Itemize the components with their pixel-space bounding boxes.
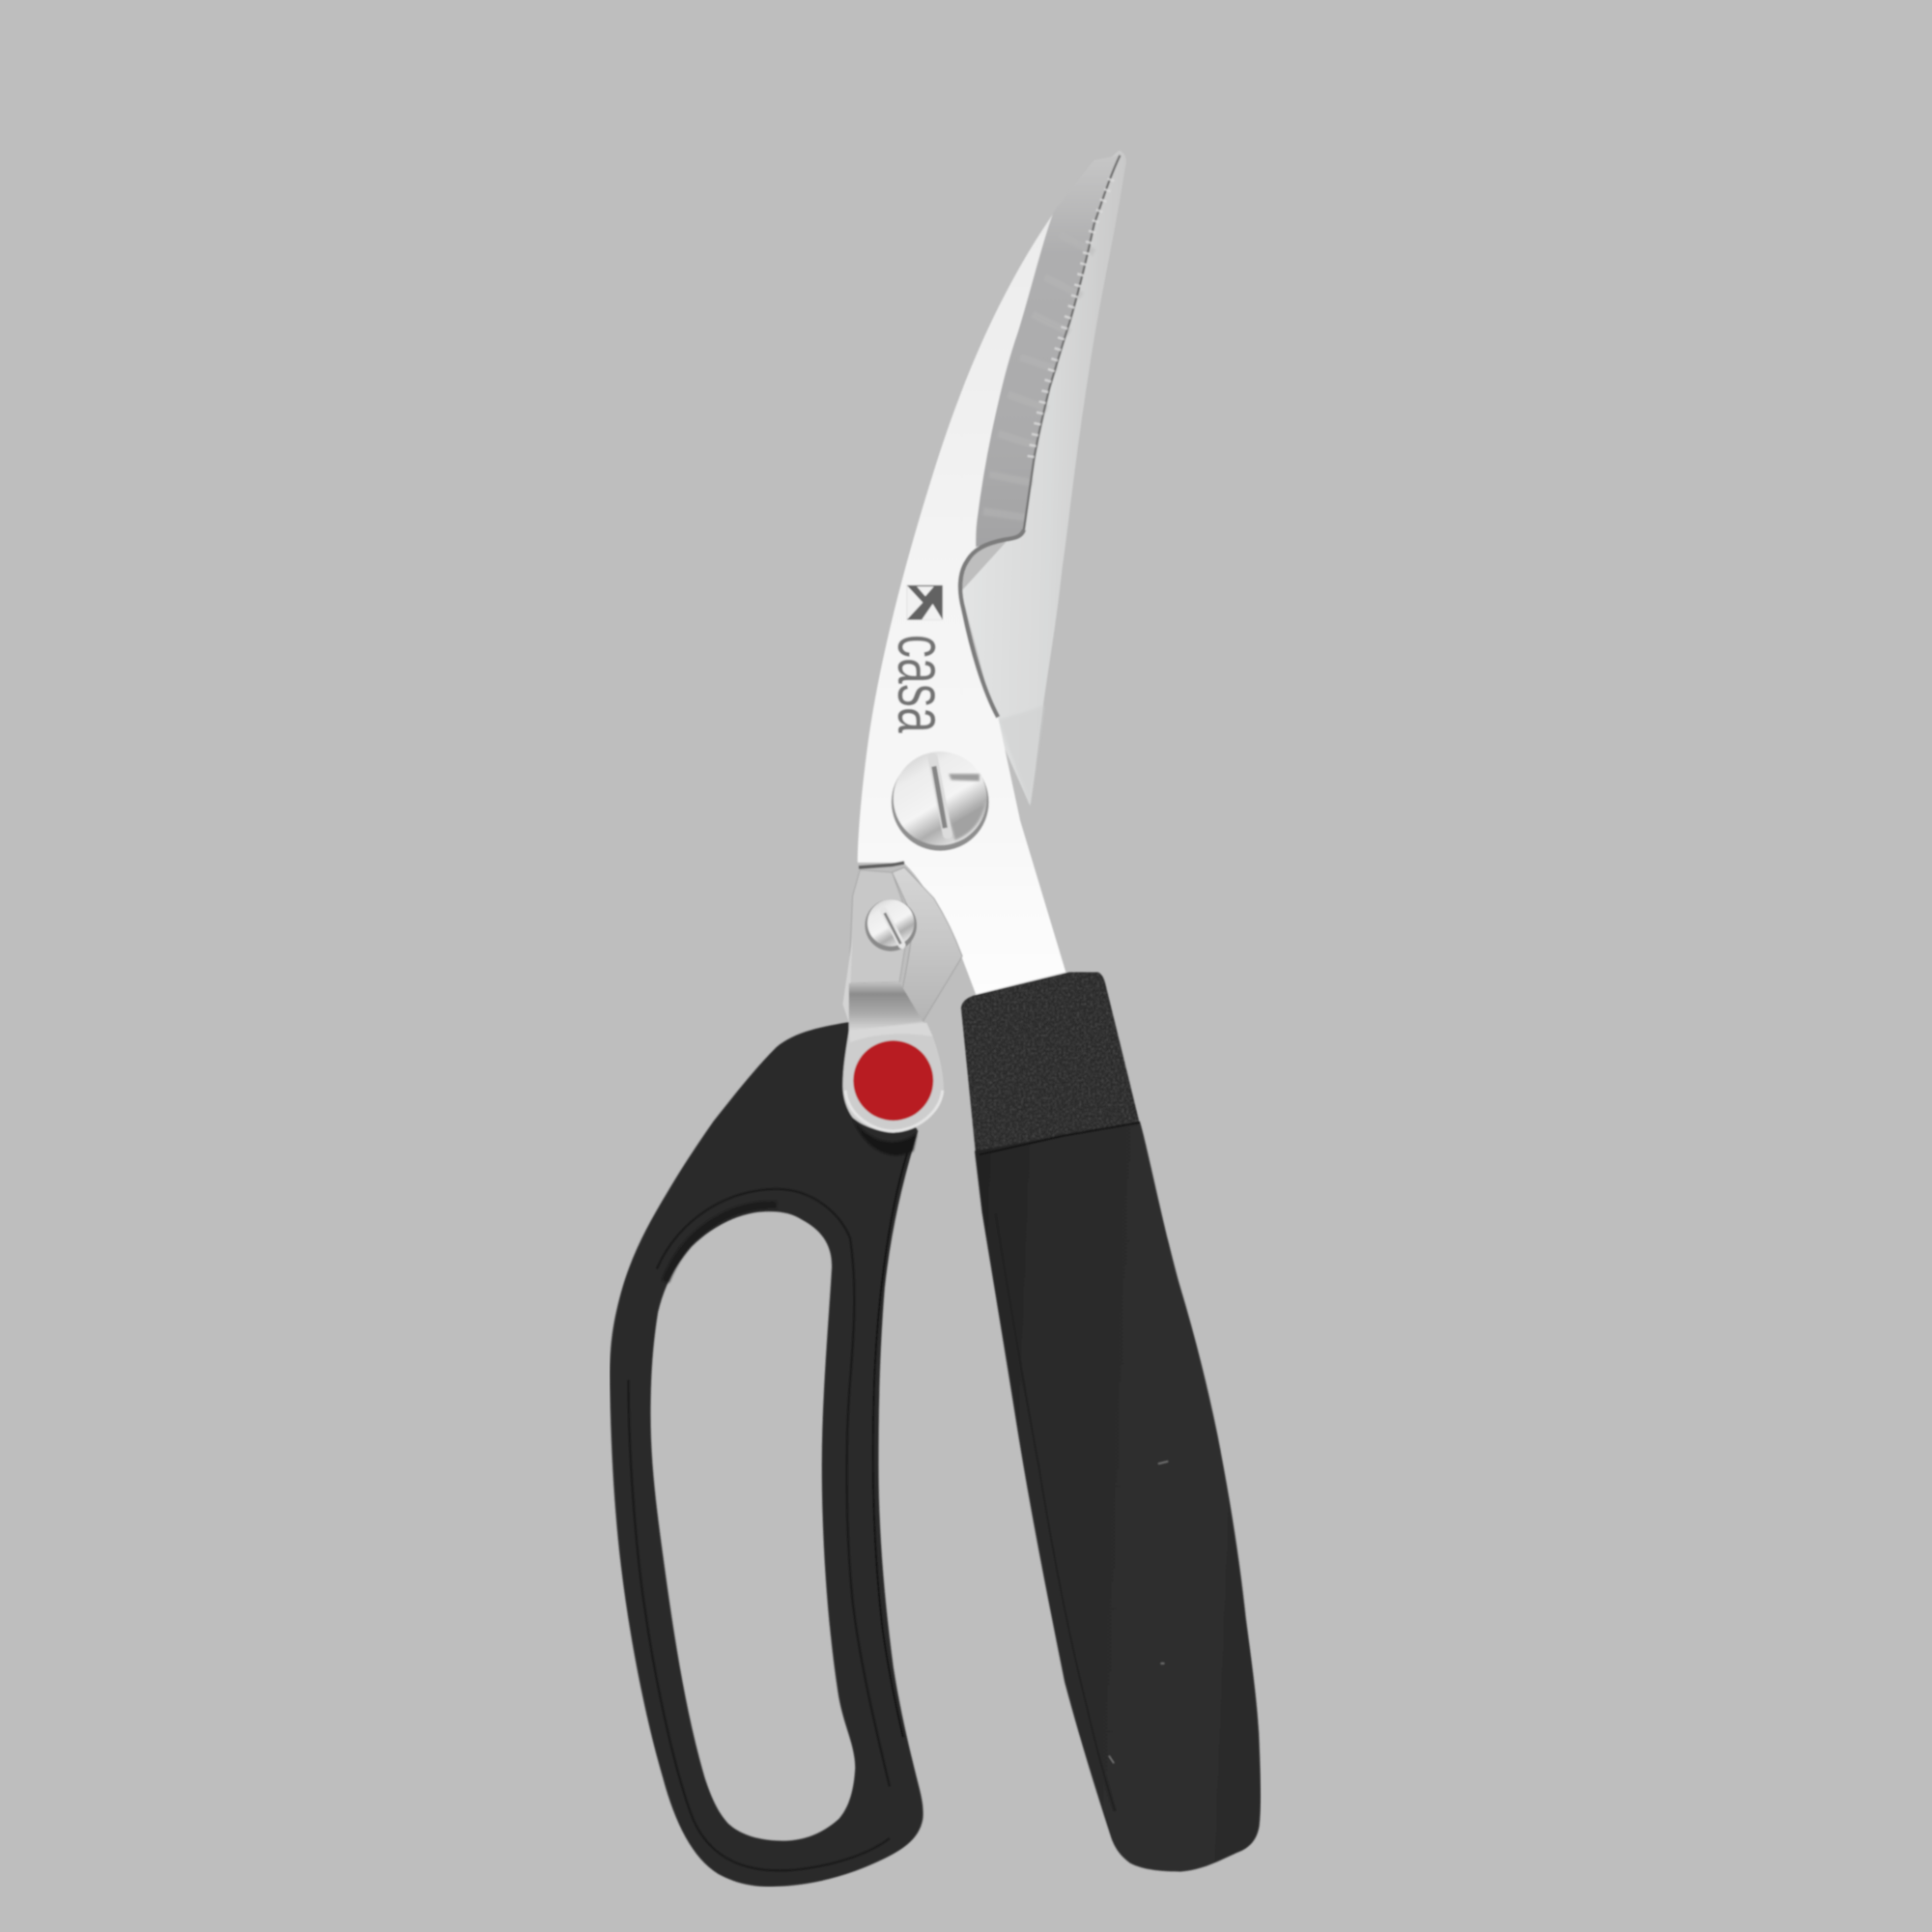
handle collar	[961, 972, 1140, 1155]
back blade	[961, 151, 1126, 806]
screw slot	[933, 757, 948, 835]
hairline streaks	[983, 234, 1094, 518]
spring plate	[842, 863, 909, 1023]
front blade	[858, 156, 1120, 994]
lower blade facet	[998, 705, 1045, 806]
shadow under pivot plate	[853, 1119, 917, 1155]
main pivot screw	[892, 752, 989, 851]
right straight handle	[961, 972, 1261, 1872]
handle grip	[975, 1122, 1261, 1872]
pivot plate eye	[842, 982, 944, 1132]
collar seam	[980, 1122, 1140, 1154]
logo mark	[907, 585, 943, 620]
notch shadow line	[960, 529, 1024, 717]
cutting edge	[1024, 156, 1120, 529]
back blade tang wedge	[892, 867, 962, 1021]
small spring screw	[865, 899, 917, 952]
brand logo etched on blade	[884, 585, 960, 734]
grip left ridge	[996, 1213, 1115, 1811]
serrated edge bevel	[976, 156, 1120, 547]
inner dark rim top of finger hole	[666, 1205, 777, 1282]
moulded ridge	[629, 1189, 890, 1870]
outer ridge right side	[873, 1140, 912, 1737]
scissors assembly	[610, 151, 1261, 1887]
grip specks	[1109, 1462, 1168, 1763]
serration teeth	[1030, 179, 1112, 461]
left loop handle	[610, 1021, 923, 1887]
logo wordmark: casa	[884, 635, 960, 734]
red button	[853, 1040, 933, 1121]
